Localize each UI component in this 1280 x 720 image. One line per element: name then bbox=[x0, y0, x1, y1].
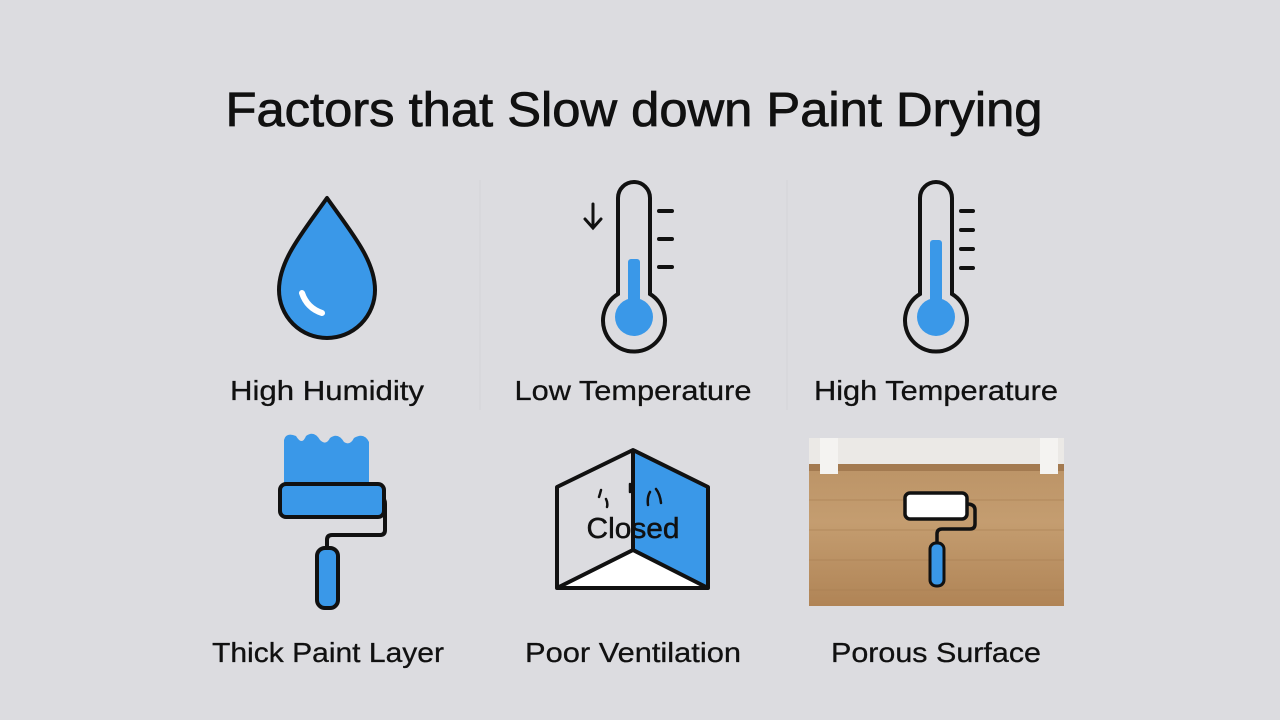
icon: closed room: Closed bbox=[586, 513, 680, 545]
label: Low Temperature: Low Temperature bbox=[514, 375, 752, 406]
label: Thick Paint Layer: Thick Paint Layer bbox=[212, 637, 444, 668]
icon: low temperature thermometer bbox=[585, 182, 672, 352]
icon: porous wood surface with roller bbox=[809, 438, 1064, 606]
label: High Humidity: High Humidity bbox=[230, 375, 424, 406]
icon: paint roller with thick paint bbox=[280, 434, 385, 608]
icon: high temperature thermometer bbox=[905, 182, 973, 352]
label: High Temperature: High Temperature bbox=[814, 375, 1058, 406]
title: Factors that Slow down Paint Drying bbox=[226, 84, 1042, 137]
label: Poor Ventilation: Poor Ventilation bbox=[525, 637, 741, 668]
icon: closed room bbox=[557, 450, 708, 588]
icon: water drop bbox=[279, 198, 375, 338]
label: Porous Surface: Porous Surface bbox=[831, 637, 1041, 668]
